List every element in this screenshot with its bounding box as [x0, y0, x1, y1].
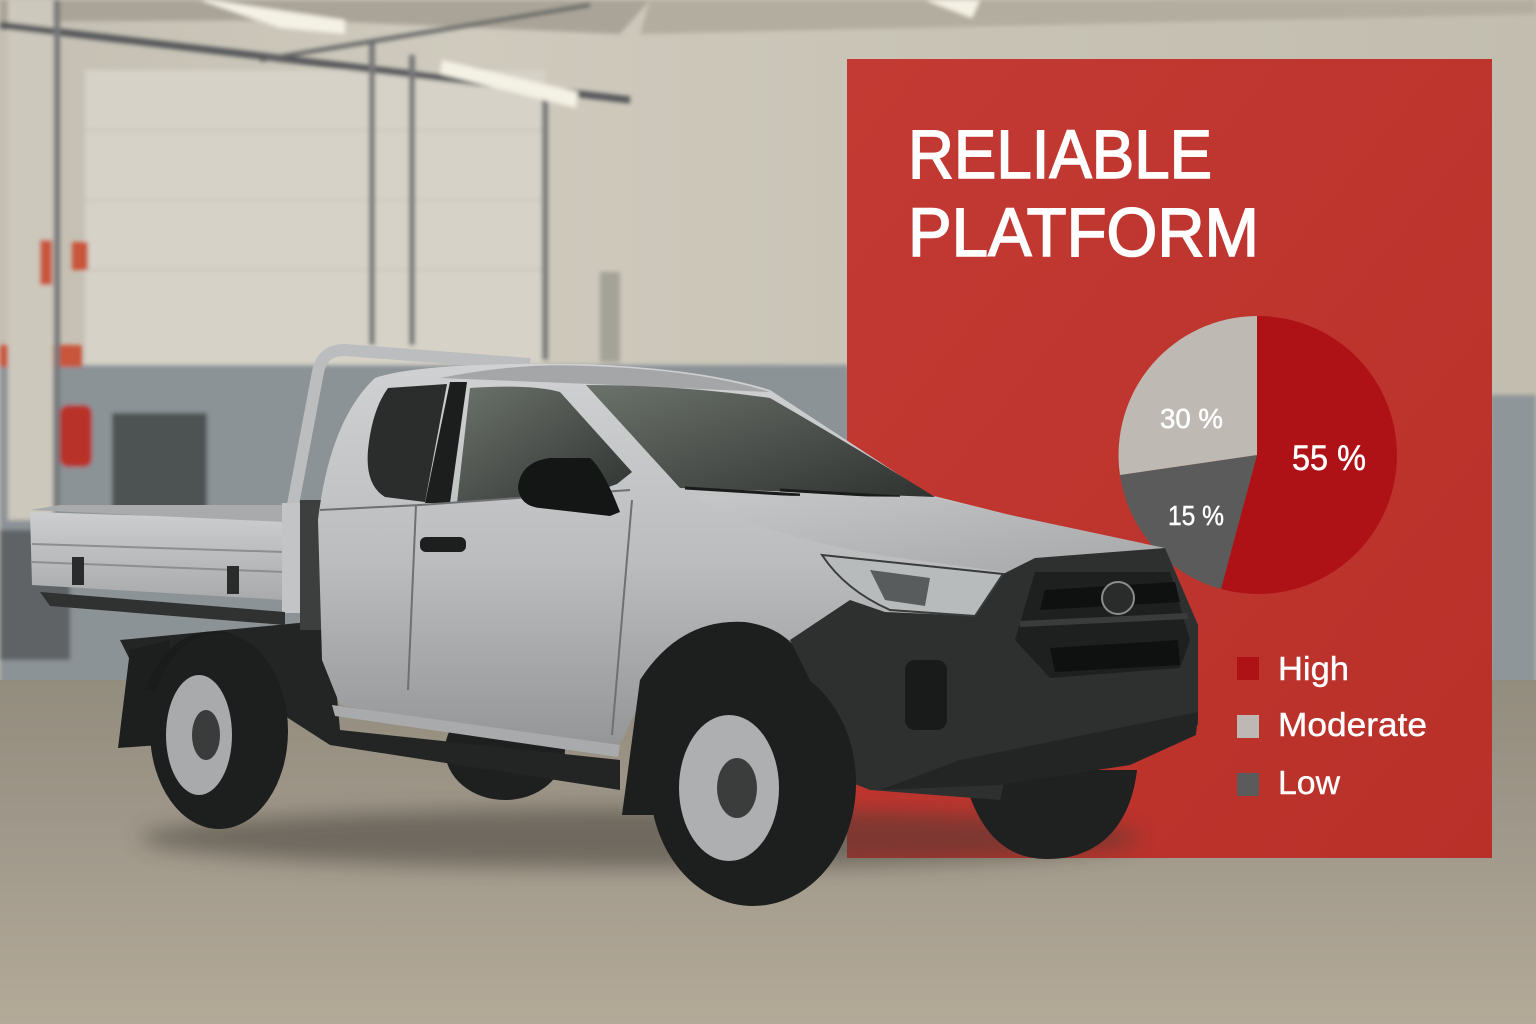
legend	[1237, 650, 1427, 801]
pickup truck	[30, 350, 1198, 906]
door lines	[320, 490, 632, 735]
legend: low	[1237, 764, 1340, 801]
pie chart	[1119, 316, 1397, 594]
cab and body	[318, 364, 1160, 755]
heading: PLATFORM	[908, 194, 1259, 271]
hood	[690, 495, 1165, 572]
front wheel arch	[622, 622, 850, 815]
rear wheel	[150, 633, 288, 829]
workshop background	[0, 0, 1536, 700]
slice: moderate 30%	[1119, 316, 1257, 475]
grille	[1015, 572, 1190, 678]
slice: high 55%	[1221, 316, 1397, 594]
headache rack	[291, 350, 530, 515]
slice: low 15%	[1120, 455, 1257, 589]
rear mud flap	[118, 640, 170, 748]
legend: high: High	[1278, 650, 1349, 687]
headlight	[822, 555, 1003, 616]
B pillar	[425, 382, 467, 503]
roof highlight	[440, 365, 770, 392]
value: 15%: 15 %	[1168, 500, 1224, 531]
value: 55%: 55 %	[1292, 439, 1366, 478]
tray	[30, 503, 302, 625]
ground shadow	[140, 808, 1140, 868]
floor	[0, 680, 1536, 1024]
fog light	[905, 660, 947, 730]
side step	[332, 705, 620, 757]
legend: low: Low	[1278, 764, 1340, 801]
heading	[908, 116, 1259, 271]
mirror	[518, 458, 620, 516]
wiper	[685, 488, 900, 497]
legend: high	[1237, 650, 1349, 687]
windscreen	[586, 385, 935, 497]
legend: moderate: Moderate	[1278, 706, 1427, 743]
chassis	[120, 620, 620, 790]
door window	[457, 387, 632, 503]
door handle	[420, 537, 466, 552]
front far wheel	[962, 770, 1137, 859]
red panel	[847, 59, 1492, 858]
rear side window	[368, 384, 447, 502]
front bumper	[790, 548, 1198, 800]
heading: RELIABLE	[908, 116, 1212, 193]
rear far wheel	[445, 700, 565, 800]
front wheel	[650, 660, 856, 906]
value: 30%: 30 %	[1160, 403, 1223, 434]
rear wheel arch	[145, 631, 268, 700]
